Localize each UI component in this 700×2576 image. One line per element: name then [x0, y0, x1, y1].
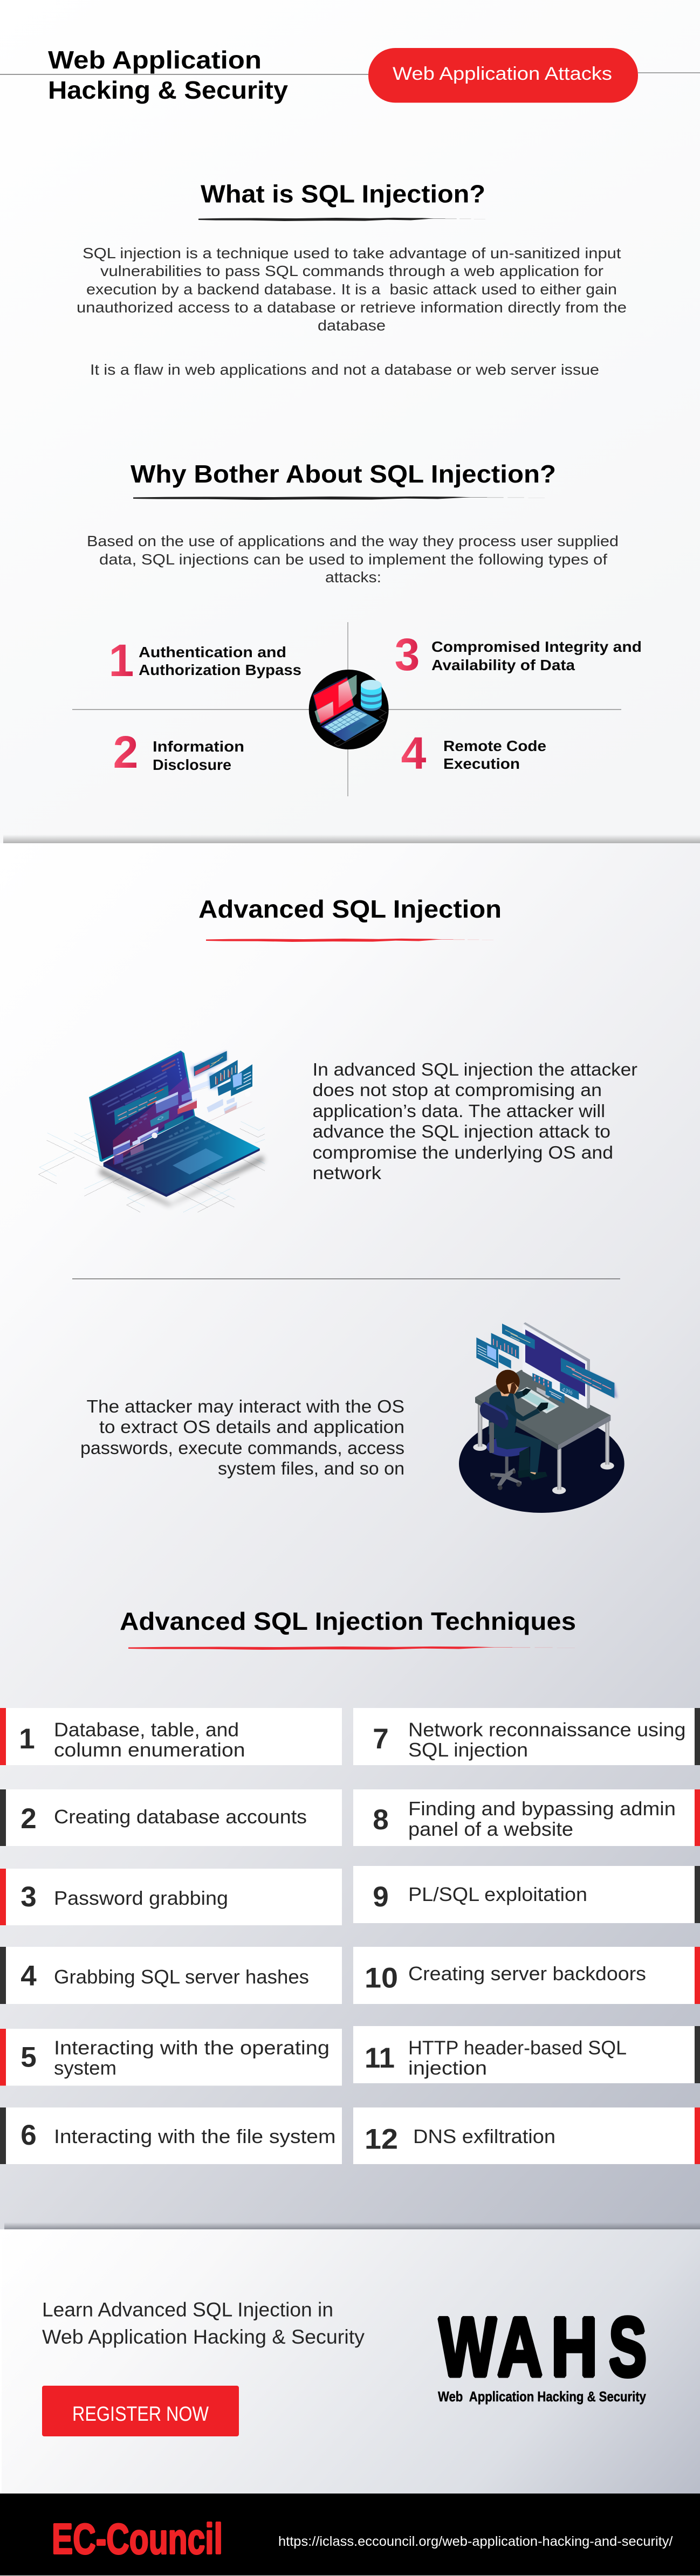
technique 5: 5: [20, 2041, 37, 2074]
title: [48, 46, 288, 104]
monitor: [523, 1323, 590, 1409]
desk: [475, 1370, 610, 1450]
text block: attacker interaction: [80, 1396, 404, 1478]
technique 3: [0, 1869, 342, 1925]
technique 8: Finding and bypassing admin: [408, 1797, 676, 1820]
text block: why bother intro: attacks:: [325, 569, 381, 586]
icon: laptop and database: [309, 670, 389, 749]
text block: why bother intro: Based on the use of applications and the way they process user supplied: [87, 533, 619, 549]
text block: advanced SQL injection explanation: In advanced SQL injection the attacker: [313, 1059, 637, 1079]
text block: why bother intro: [87, 533, 619, 586]
heading: What is SQL Injection: [198, 180, 485, 221]
text block: SQL injection definition: It is a flaw in web applications and not a database or web server issue: [90, 361, 599, 378]
logo: WAHS: H: [551, 2300, 598, 2394]
technique 11: injection: [408, 2057, 487, 2079]
floating code panels: 43%: [561, 1387, 574, 1396]
footer: [0, 2494, 700, 2575]
badge: topic pill: [368, 48, 638, 102]
technique 7: [353, 1708, 700, 1765]
text block: attacker interaction: The attacker may interact with the OS: [86, 1396, 404, 1416]
technique 9: 9: [373, 1881, 389, 1913]
header: [0, 46, 700, 104]
screen panels: [114, 1085, 169, 1125]
heading: Advanced SQL Injection Techniques: Advanced SQL Injection Techniques: [120, 1607, 576, 1635]
panel: call to action: [2, 2229, 700, 2494]
logo: WAHS: W: [439, 2300, 497, 2394]
footer link: https://iclass.eccouncil.org/web-application-hacking-and-security/: [278, 2534, 673, 2549]
attack 3: Availability of Data: [431, 657, 575, 673]
heading: Why Bother About SQL Injection: [131, 460, 556, 500]
attack 2: [113, 727, 244, 777]
technique 5: Interacting with the operating: [54, 2037, 330, 2058]
technique 4: [0, 1947, 342, 2004]
chair back: [480, 1402, 509, 1453]
technique 3: 3: [20, 1881, 37, 1913]
panel: intro section background: [0, 0, 700, 843]
technique 3: Password grabbing: [54, 1887, 228, 1909]
technique 5: [0, 2029, 342, 2085]
technique 12: 12: [365, 2124, 398, 2155]
illustration: attacker at desk: [459, 1323, 624, 1513]
logo: EC-Council: EC-Council: [52, 2515, 223, 2563]
technique 10: [353, 1947, 700, 2004]
technique 1: Database, table, and: [54, 1719, 239, 1740]
text block: advanced SQL injection explanation: does not stop at compromising an: [313, 1080, 602, 1100]
attack 2: Information: [153, 738, 244, 755]
technique 8: [353, 1789, 700, 1846]
technique 11: 11: [365, 2042, 395, 2074]
button: register now: REGISTER NOW: [72, 2403, 209, 2426]
text block: advanced SQL injection explanation: advance the SQL injection attack to: [313, 1121, 610, 1141]
button: register now: [42, 2386, 239, 2436]
section shadow: [3, 835, 700, 843]
attack 1: Authorization Bypass: [139, 662, 301, 678]
chair seat and base: [486, 1437, 529, 1490]
heading: Advanced SQL Injection Techniques: [120, 1607, 576, 1650]
screen: [89, 1051, 195, 1162]
title: Hacking & Security: [48, 76, 288, 104]
text block: attacker interaction: to extract OS details and application: [99, 1417, 404, 1437]
heading: Advanced SQL Injection: [198, 895, 502, 942]
technique 1: [0, 1708, 342, 1765]
illustration: laptop with floating panels: <>: [156, 1114, 165, 1123]
attack 3: 3: [395, 629, 420, 680]
heading: Advanced SQL Injection: Advanced SQL Injection: [198, 895, 502, 923]
keyboard: [514, 1387, 559, 1414]
technique 4: 4: [20, 1960, 37, 1992]
call to action text: Web Application Hacking & Security: [42, 2326, 365, 2348]
technique 5: system: [54, 2057, 116, 2079]
technique 7: 7: [373, 1723, 389, 1755]
text block: SQL injection definition: execution by a backend database. It is a basic attack used to either gain: [86, 281, 617, 298]
technique 10: 10: [365, 1962, 398, 1994]
attack 4: [401, 728, 546, 779]
attack 2: Disclosure: [153, 756, 231, 773]
technique 1: column enumeration: [54, 1739, 245, 1761]
call to action text: [42, 2299, 365, 2348]
illustration: laptop with floating panels: [39, 1050, 265, 1212]
technique 9: PL/SQL exploitation: [408, 1883, 587, 1905]
technique 2: [0, 1789, 342, 1846]
text block: why bother intro: data, SQL injections can be used to implement the following types of: [99, 551, 607, 568]
text block: SQL injection definition: vulnerabilities to pass SQL commands through a web application for: [100, 263, 603, 279]
technique 2: Creating database accounts: [54, 1806, 307, 1828]
text block: SQL injection definition: unauthorized access to a database or retrieve information directly from the: [77, 299, 627, 316]
technique 6: 6: [20, 2119, 37, 2151]
section shadow: [4, 2222, 700, 2229]
floating panels: [189, 1075, 223, 1093]
technique 7: SQL injection: [408, 1739, 528, 1761]
attack 1: 1: [109, 635, 134, 686]
text block: SQL injection definition: SQL injection is a technique used to take advantage of un-sanitized input: [83, 245, 621, 261]
diagram: four attack types: [72, 622, 642, 796]
logo: WAHS: S: [609, 2300, 647, 2394]
attack 4: 4: [401, 728, 427, 779]
attack 1: Authentication and: [139, 644, 286, 660]
text block: advanced SQL injection explanation: application’s data. The attacker will: [313, 1101, 605, 1121]
attack 1: [109, 635, 301, 686]
list: SQL injection techniques: [0, 1708, 700, 2164]
text block: advanced SQL injection explanation: compromise the underlying OS and: [313, 1142, 613, 1162]
logo: WAHS: A: [497, 2300, 543, 2394]
heading: What is SQL Injection: What is SQL Injection?: [201, 180, 485, 208]
technique 10: Creating server backdoors: [408, 1962, 646, 1985]
panel: advanced section background: [0, 843, 700, 2229]
heading: Why Bother About SQL Injection: Why Bother About SQL Injection?: [131, 460, 556, 488]
text block: SQL injection definition: database: [318, 317, 386, 334]
call to action text: Learn Advanced SQL Injection in: [42, 2299, 333, 2320]
text block: advanced SQL injection explanation: [313, 1059, 637, 1183]
technique 4: Grabbing SQL server hashes: [54, 1966, 309, 1988]
technique 8: 8: [373, 1804, 389, 1836]
attack 3: Compromised Integrity and: [431, 638, 642, 655]
technique 12: [353, 2107, 700, 2164]
title: Web Application: [48, 46, 262, 74]
technique 7: Network reconnaissance using: [408, 1719, 686, 1740]
logo: WAHS: [438, 2300, 647, 2405]
attack 4: Execution: [443, 755, 520, 772]
technique 12: DNS exfiltration: [413, 2125, 555, 2147]
text block: advanced SQL injection explanation: network: [313, 1163, 382, 1183]
desk legs: [473, 1403, 614, 1494]
text block: attacker interaction: passwords, execute commands, access: [80, 1438, 404, 1458]
badge: topic pill: Web Application Attacks: [393, 64, 612, 84]
technique 8: panel of a website: [408, 1818, 573, 1840]
logo: WAHS: Web Application Hacking & Security: [438, 2388, 646, 2405]
technique 2: 2: [20, 1803, 37, 1835]
technique 11: [353, 2026, 700, 2083]
attack 3: [395, 629, 642, 680]
floating code panels: [476, 1324, 617, 1403]
text block: SQL injection definition: [77, 245, 627, 378]
technique 6: Interacting with the file system: [54, 2125, 335, 2147]
keyboard bars: [117, 1121, 220, 1174]
technique 11: HTTP header-based SQL: [408, 2037, 627, 2058]
person: [489, 1370, 548, 1480]
text block: attacker interaction: system files, and so on: [218, 1458, 404, 1478]
technique 9: [353, 1866, 700, 1923]
attack 2: 2: [113, 727, 138, 777]
technique 1: 1: [19, 1723, 35, 1755]
attack 4: Remote Code: [443, 738, 546, 754]
technique 6: [0, 2107, 342, 2164]
